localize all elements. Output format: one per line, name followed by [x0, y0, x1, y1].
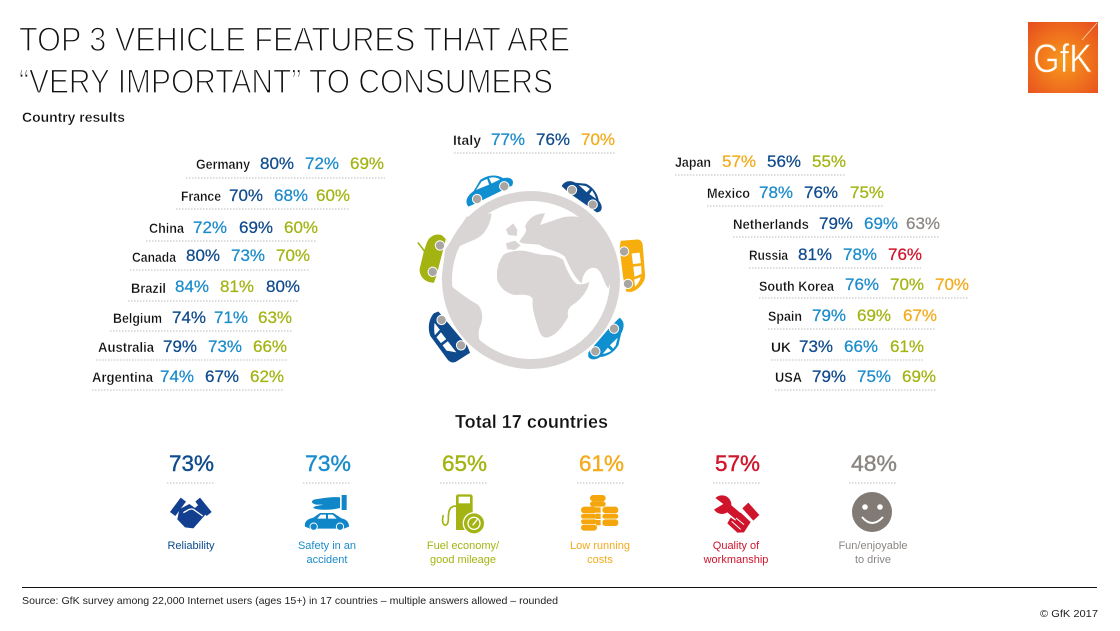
row: Mexico: Mexico — [707, 185, 750, 201]
feature: safety: 73% — [305, 451, 351, 476]
row: Brazil: 80% — [266, 277, 300, 296]
row: Russia: 81% — [798, 245, 832, 264]
feature: fun to drive — [838, 451, 908, 566]
row: Japan: 56% — [767, 152, 801, 171]
copyright: © GfK 2017 — [1040, 608, 1098, 620]
icon: coins — [581, 495, 618, 531]
logo: GfK: GfK — [1033, 37, 1092, 81]
row: Japan: Japan — [675, 154, 711, 170]
row: Australia: Australia — [98, 339, 154, 355]
feature: quality of workmanship: workmanship — [703, 554, 768, 566]
feature: fuel economy: Fuel economy/ — [427, 540, 500, 552]
icon: fuel pump with gauge — [443, 494, 485, 534]
row: UK: 66% — [844, 337, 878, 356]
row: Spain: Spain — [768, 308, 802, 324]
row: Spain: 67% — [903, 306, 937, 325]
row: Netherlands: 69% — [864, 214, 898, 233]
row: Argentina: 62% — [250, 367, 284, 386]
row: UK — [771, 337, 924, 360]
heading: country results: Country results — [22, 109, 125, 125]
feature: low running costs: costs — [587, 554, 613, 566]
row: Belgium: 74% — [172, 308, 206, 327]
row: France — [176, 186, 350, 209]
row: South Korea: 76% — [845, 275, 879, 294]
row: Brazil: 81% — [220, 277, 254, 296]
row: Russia: Russia — [749, 247, 788, 263]
row: Belgium — [110, 308, 292, 331]
row: Brazil: Brazil — [131, 280, 166, 296]
row: Mexico: 78% — [759, 183, 793, 202]
logo: GfK — [1028, 22, 1098, 93]
feature: safety — [298, 451, 356, 566]
globe with cars — [409, 167, 648, 367]
feature: reliability: Reliability — [167, 540, 215, 552]
title: TOP 3 VEHICLE FEATURES THAT ARE — [19, 21, 570, 59]
feature: fun to drive: Fun/enjoyable — [838, 540, 908, 552]
footer rule — [22, 586, 1097, 588]
feature: quality of workmanship: 57% — [715, 451, 760, 476]
row: France: France — [181, 188, 221, 204]
row: UK: 73% — [799, 337, 833, 356]
row: Belgium: 63% — [258, 308, 292, 327]
row: Brazil: 84% — [175, 277, 209, 296]
row: France: 70% — [229, 186, 263, 205]
car: yellow van — [618, 238, 648, 293]
row: Italy: 76% — [536, 130, 570, 149]
row: Japan: 57% — [722, 152, 756, 171]
car: light blue sedan — [460, 167, 515, 208]
row: Australia: 66% — [253, 337, 287, 356]
feature: fuel economy: 65% — [442, 451, 487, 476]
icon: handshake — [170, 498, 212, 528]
row: Germany: Germany — [196, 156, 250, 172]
row: USA: 69% — [902, 367, 936, 386]
row: South Korea: 70% — [935, 275, 969, 294]
row: Spain: 79% — [812, 306, 846, 325]
feature: fuel economy: good mileage — [430, 554, 496, 566]
row: USA — [775, 367, 936, 390]
title — [19, 21, 570, 101]
row: South Korea: South Korea — [759, 278, 834, 294]
row: Canada: 80% — [186, 246, 220, 265]
row: China: 60% — [284, 218, 318, 237]
row: Netherlands — [733, 214, 940, 237]
row: Germany: 80% — [260, 154, 294, 173]
feature: quality of workmanship: Quality of — [713, 540, 760, 552]
row: Spain: 69% — [857, 306, 891, 325]
row: Canada: 70% — [276, 246, 310, 265]
icon: wrench and hand — [707, 494, 759, 533]
row: Russia — [749, 245, 922, 268]
row: France: 60% — [316, 186, 350, 205]
icon: hand over car — [305, 495, 349, 530]
row: Argentina — [92, 367, 284, 390]
car: light blue sedan lower right — [586, 316, 633, 367]
source note: Source: GfK survey among 22,000 Internet users (ages 15+) in 17 countries – multiple answers allowed – rounded — [22, 595, 558, 607]
row: Germany: 69% — [350, 154, 384, 173]
feature: quality of workmanship — [703, 451, 768, 566]
row: Russia: 76% — [888, 245, 922, 264]
row: Argentina: 74% — [160, 367, 194, 386]
row: China — [146, 218, 318, 241]
row: China: China — [149, 220, 184, 236]
row: USA: USA — [775, 369, 802, 385]
row: Italy: 70% — [581, 130, 615, 149]
row: USA: 75% — [857, 367, 891, 386]
feature: low running costs — [570, 451, 630, 566]
row: China: 69% — [239, 218, 273, 237]
row: Japan: 55% — [812, 152, 846, 171]
row: Italy — [453, 130, 615, 153]
row: France: 68% — [274, 186, 308, 205]
globe — [442, 196, 615, 364]
row: Germany — [186, 154, 385, 178]
feature: fun to drive: 48% — [851, 451, 897, 476]
row: Australia — [96, 337, 287, 360]
row: Australia: 73% — [208, 337, 242, 356]
row: Australia: 79% — [163, 337, 197, 356]
row: Belgium: 71% — [214, 308, 248, 327]
row: China: 72% — [193, 218, 227, 237]
icon: smiley — [852, 492, 892, 532]
row: Canada — [130, 246, 310, 270]
car: dark blue van — [420, 309, 472, 366]
row: UK: UK — [771, 339, 791, 355]
row: USA: 79% — [812, 367, 846, 386]
feature: safety: Safety in an — [298, 540, 356, 552]
feature: reliability — [167, 451, 215, 552]
row: Canada: 73% — [231, 246, 265, 265]
feature: fun to drive: to drive — [855, 554, 891, 566]
row: South Korea: 70% — [890, 275, 924, 294]
feature: reliability: 73% — [169, 451, 214, 476]
heading: total 17 countries: Total 17 countries — [455, 412, 608, 432]
feature: safety: accident — [307, 554, 347, 566]
row: Germany: 72% — [305, 154, 339, 173]
car: dark blue sedan — [560, 173, 609, 214]
row: Argentina: Argentina — [92, 369, 153, 385]
row: Argentina: 67% — [205, 367, 239, 386]
feature: low running costs: Low running — [570, 540, 630, 552]
row: Netherlands: 79% — [819, 214, 853, 233]
row: South Korea — [759, 275, 969, 298]
row: UK: 61% — [890, 337, 924, 356]
feature: low running costs: 61% — [579, 451, 624, 476]
row: Netherlands: Netherlands — [733, 216, 809, 232]
row: Mexico: 75% — [850, 183, 884, 202]
row: Spain — [768, 306, 937, 329]
row: Italy: Italy — [453, 132, 481, 148]
row: Mexico — [707, 183, 884, 206]
row: Brazil — [128, 277, 300, 301]
title: “VERY IMPORTANT” TO CONSUMERS — [19, 63, 553, 101]
car: green convertible — [409, 230, 447, 284]
row: Italy: 77% — [491, 130, 525, 149]
row: Japan — [675, 152, 846, 175]
feature: fuel economy — [427, 451, 500, 566]
row: Russia: 78% — [843, 245, 877, 264]
row: Netherlands: 63% — [906, 214, 940, 233]
row: Canada: Canada — [132, 249, 176, 265]
row: Belgium: Belgium — [113, 310, 162, 326]
row: Mexico: 76% — [804, 183, 838, 202]
